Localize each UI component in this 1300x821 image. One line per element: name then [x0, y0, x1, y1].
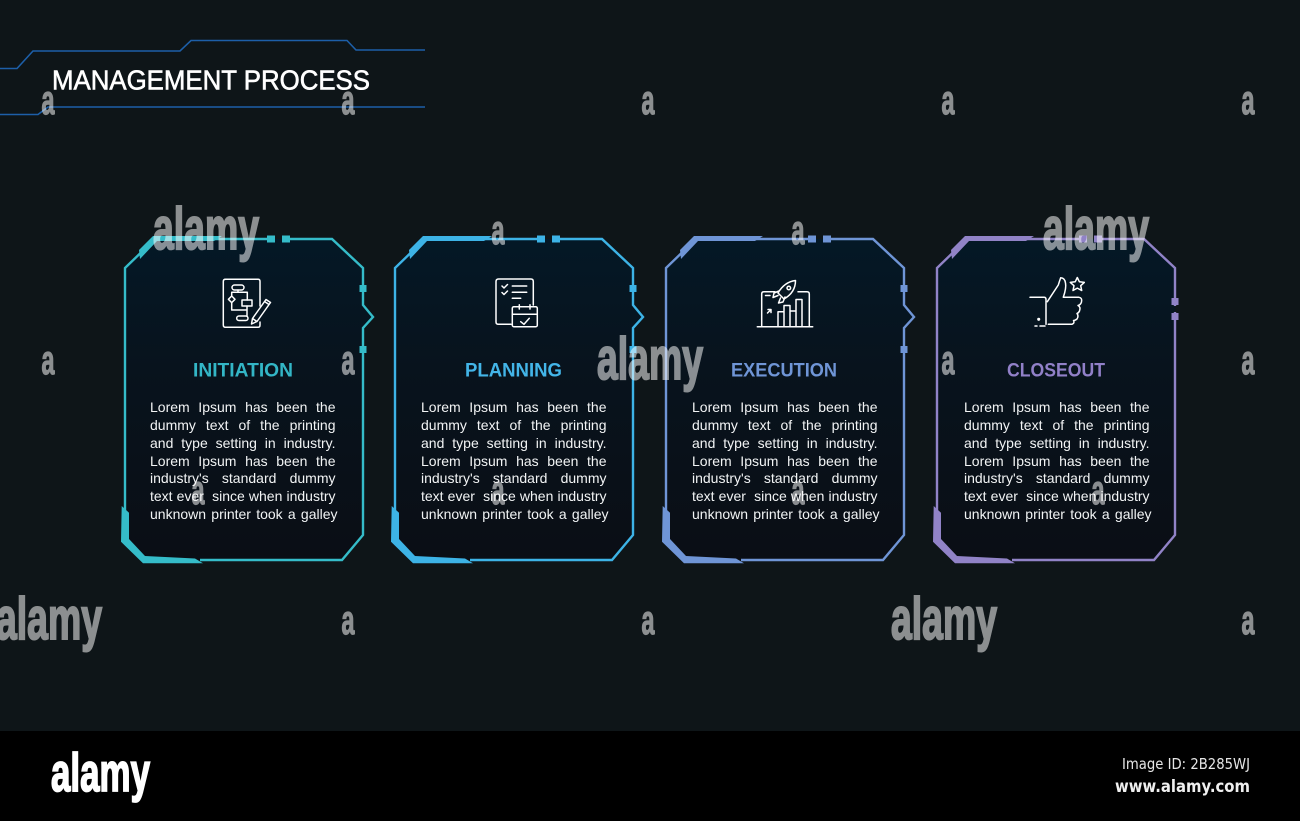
body text: execution: unknown printer took a galley	[692, 506, 880, 522]
body text: execution	[692, 399, 880, 522]
watermark overlay: alamy	[1043, 196, 1149, 262]
watermark overlay: a	[342, 597, 355, 643]
body text: planning: text ever since when industry	[421, 488, 606, 504]
website: www.alamy.com	[1115, 777, 1250, 796]
body text: initiation: Lorem Ipsum has been the	[150, 399, 336, 415]
heading: execution: EXECUTION	[731, 360, 837, 382]
body text: initiation: Lorem Ipsum has been the	[150, 453, 336, 469]
body text: closeout: Lorem Ipsum has been the	[964, 453, 1150, 469]
heading: planning: PLANNING	[465, 360, 562, 382]
watermark overlay: a	[42, 77, 55, 123]
watermark overlay: alamy	[891, 586, 997, 652]
body text: execution: text ever since when industry	[692, 488, 878, 504]
body text: planning: Lorem Ipsum has been the	[421, 453, 606, 469]
body text: initiation: and type setting in industry.	[150, 435, 336, 451]
heading: initiation: INITIATION	[193, 360, 293, 382]
watermark overlay: a	[1242, 597, 1255, 643]
body text: closeout: text ever since when industry	[964, 488, 1150, 504]
header: title with circuit lines	[0, 40, 425, 116]
body text: execution: and type setting in industry.	[692, 435, 878, 451]
body text: initiation: dummy text of the printing	[150, 417, 336, 433]
panel: closeout	[933, 236, 1178, 564]
watermark overlay: a	[492, 207, 505, 253]
watermark overlay: a	[342, 337, 355, 383]
watermark overlay: a	[42, 337, 55, 383]
watermark overlay: a	[792, 467, 805, 513]
watermark overlay: a	[942, 337, 955, 383]
body text: initiation: unknown printer took a galley	[150, 506, 338, 522]
watermark overlay: a	[192, 467, 205, 513]
body text: initiation: industry's standard dummy	[150, 470, 336, 486]
image id: Image ID: 2B285WJ	[1122, 755, 1250, 773]
panel: planning	[391, 236, 644, 564]
body text: initiation: text ever since when industry	[150, 488, 336, 504]
body text: execution: Lorem Ipsum has been the	[692, 399, 878, 415]
watermark overlay: a	[1092, 467, 1105, 513]
icon: rocket and laptop chart	[757, 280, 813, 327]
frame	[121, 236, 373, 563]
watermark overlay: a	[642, 597, 655, 643]
body text: execution: dummy text of the printing	[692, 417, 878, 433]
icon: checklist and calendar	[496, 279, 537, 327]
body text: closeout: unknown printer took a galley	[964, 506, 1152, 522]
watermark overlay: a	[792, 207, 805, 253]
body text: planning: unknown printer took a galley	[421, 506, 608, 522]
body text: closeout: Lorem Ipsum has been the	[964, 399, 1150, 415]
body text: execution: Lorem Ipsum has been the	[692, 453, 878, 469]
body text: closeout: industry's standard dummy	[964, 470, 1150, 486]
watermark overlay: alamy	[0, 586, 102, 652]
watermark overlay: a	[942, 77, 955, 123]
footer logo: alamy	[51, 743, 150, 803]
panel: execution	[662, 236, 916, 564]
icon: thumbs up with star	[1030, 278, 1084, 326]
body text: initiation	[150, 399, 338, 522]
frame	[662, 236, 914, 563]
body text: planning: Lorem Ipsum has been the	[421, 399, 606, 415]
body text: execution: industry's standard dummy	[692, 470, 878, 486]
frame	[933, 236, 1178, 563]
body text: closeout: and type setting in industry.	[964, 435, 1150, 451]
watermark overlay: a	[1242, 77, 1255, 123]
body text: closeout	[964, 399, 1152, 522]
watermark overlay: alamy	[153, 196, 259, 262]
header: title with circuit lines: MANAGEMENT PROCESS	[52, 64, 370, 96]
watermark overlay: a	[1242, 337, 1255, 383]
watermark overlay: a	[642, 77, 655, 123]
body text: planning: industry's standard dummy	[421, 470, 606, 486]
panel: initiation	[121, 236, 374, 564]
body text: planning	[421, 399, 608, 522]
icon: flowchart on document with pen	[223, 279, 270, 327]
heading: closeout: CLOSEOUT	[1007, 360, 1105, 382]
watermark overlay: a	[342, 77, 355, 123]
watermark overlay: alamy	[597, 326, 703, 392]
body text: planning: dummy text of the printing	[421, 417, 606, 433]
body text: closeout: dummy text of the printing	[964, 417, 1150, 433]
watermark overlay: a	[492, 467, 505, 513]
frame	[391, 236, 643, 563]
footer band	[0, 731, 1300, 821]
body text: planning: and type setting in industry.	[421, 435, 606, 451]
